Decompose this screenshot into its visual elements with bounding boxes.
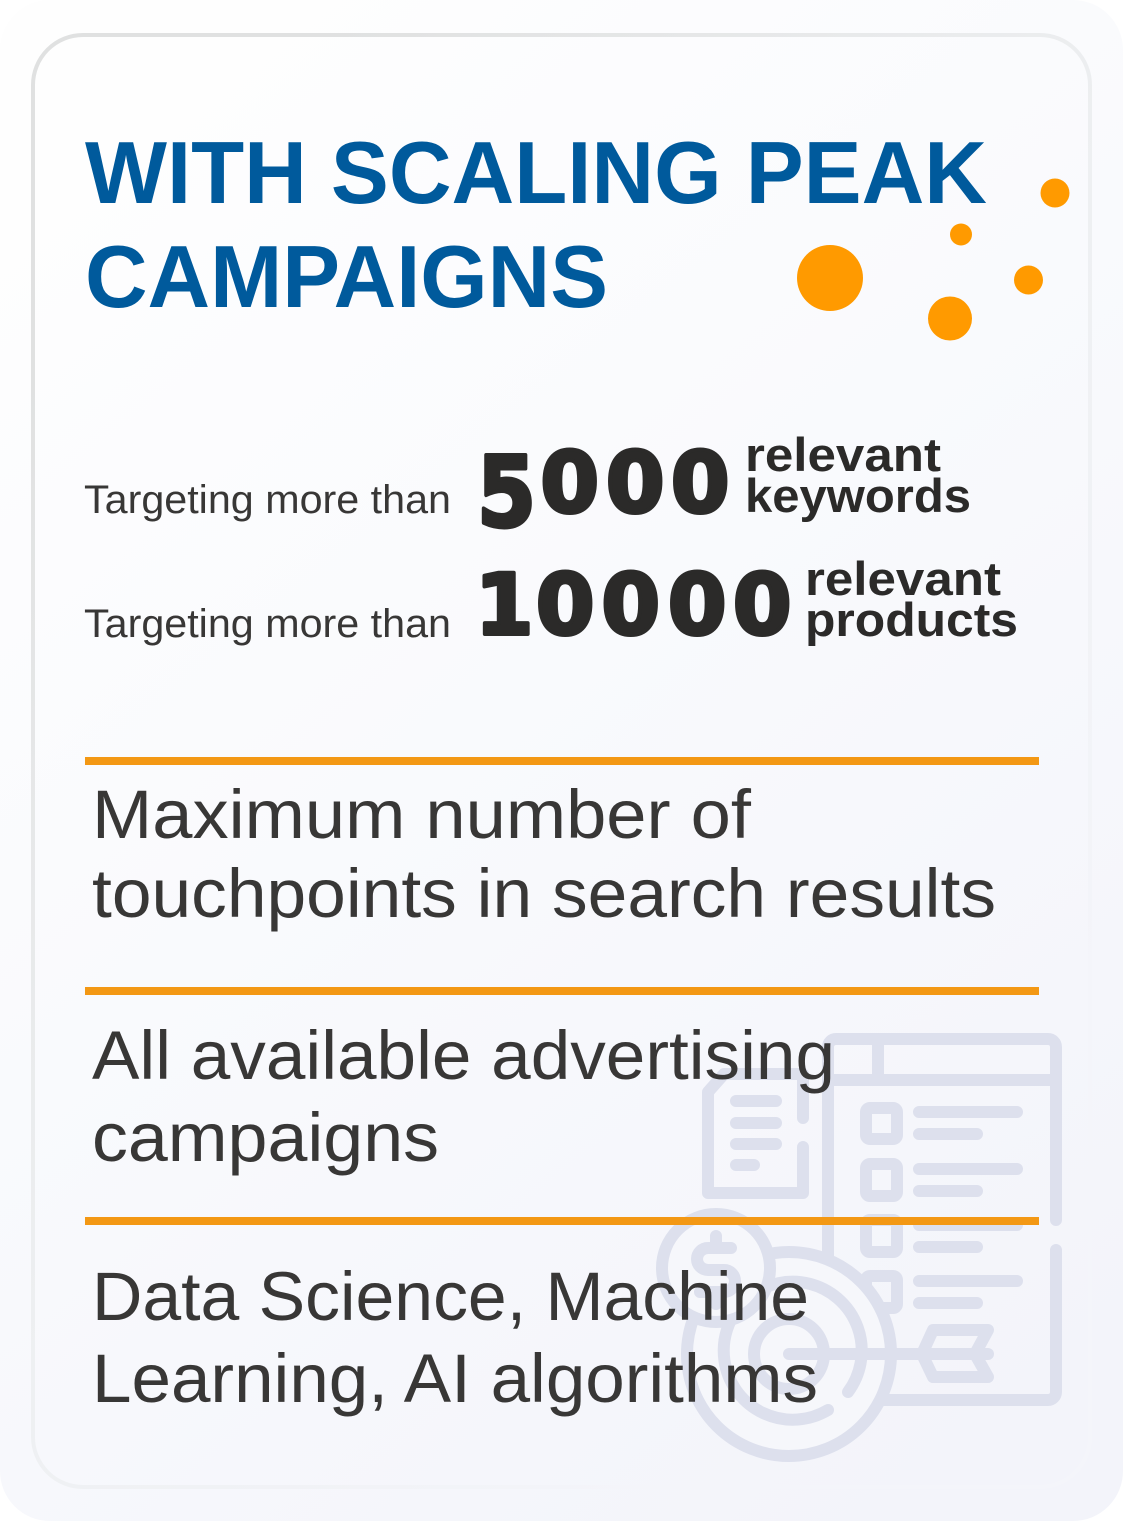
icon: target with arrow — [687, 1252, 988, 1456]
text: relevant products: relevant — [805, 552, 1001, 605]
text block: maximum touchpoints: touchpoints in search results — [92, 855, 996, 932]
text: relevant products: products — [805, 593, 1018, 646]
number: 5000: 5 — [477, 436, 536, 549]
icon: campaign window, document, coin and target — [662, 1039, 1056, 1456]
text block: maximum touchpoints — [92, 776, 996, 932]
text: relevant keywords: keywords — [745, 469, 971, 522]
text block: data science: Data Science, Machine — [92, 1258, 809, 1335]
text: targeting label: Targeting more than — [84, 602, 451, 646]
title: WITH SCALING PEAK — [85, 123, 987, 222]
text: relevant keywords: relevant — [745, 428, 941, 481]
icon: dollar coin — [662, 1214, 770, 1322]
text block: data science: Learning, AI algorithms — [92, 1340, 818, 1417]
text block: maximum touchpoints: Maximum number of — [92, 776, 752, 853]
text block: advertising campaigns: campaigns — [92, 1099, 439, 1176]
text block: advertising campaigns — [92, 1017, 835, 1176]
stat: 10000 relevant products — [84, 552, 1018, 654]
number: 5000: 000 — [540, 434, 729, 532]
text block: data science — [92, 1258, 818, 1417]
text: targeting label: Targeting more than — [84, 478, 451, 522]
number: 10000: 10000 — [475, 556, 791, 654]
decorative orange dots — [797, 178, 1070, 340]
title — [85, 123, 987, 326]
text: relevant products — [805, 552, 1018, 646]
stat: 5000 relevant keywords — [84, 428, 971, 549]
icon: document — [708, 1074, 803, 1193]
text block: advertising campaigns: All available advertising — [92, 1017, 835, 1094]
title: CAMPAIGNS — [85, 227, 608, 326]
icon: browser window with list — [828, 1039, 1056, 1400]
text: relevant keywords — [745, 428, 971, 522]
